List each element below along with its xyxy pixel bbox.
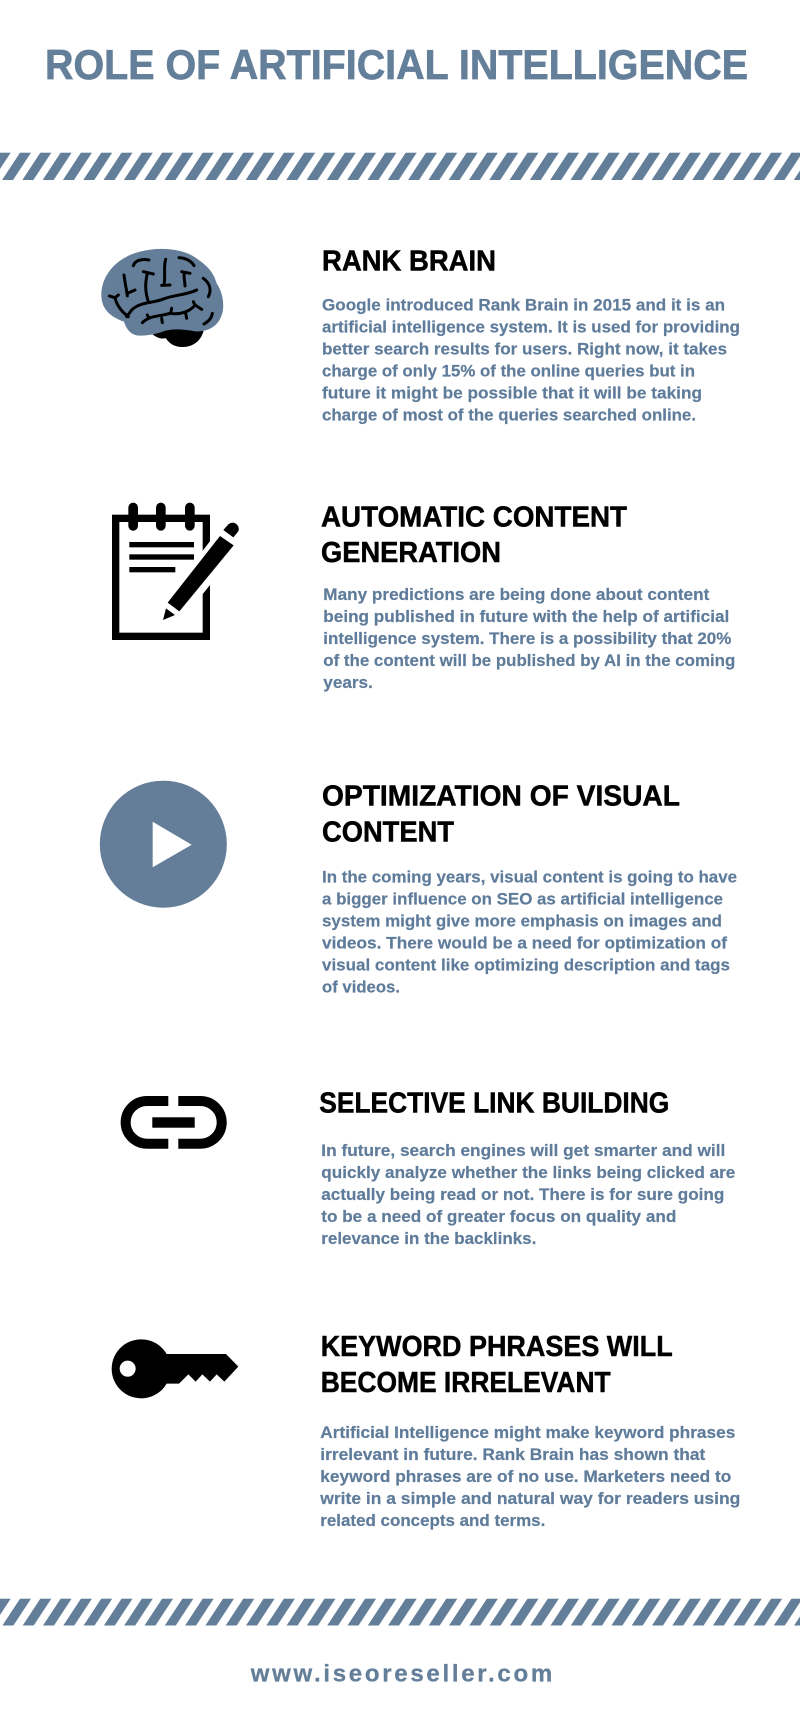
text: selective link building: actually being read or not. There is for sure going <box>321 1185 724 1204</box>
heading: automatic content generation <box>321 502 627 569</box>
heading: automatic content generation: AUTOMATIC CONTENT <box>321 502 627 534</box>
text: selective link building: to be a need of greater focus on quality and <box>321 1207 676 1226</box>
text: keyword phrases will become irrelevant: Artificial Intelligence might make keyword phrases <box>320 1423 735 1442</box>
bottom striped band <box>0 1599 800 1626</box>
text: rank brain: charge of most of the queries searched online. <box>322 406 696 425</box>
text: optimization of visual content: visual content like optimizing description and tags <box>322 955 730 974</box>
text: automatic content generation <box>323 585 735 692</box>
text: keyword phrases will become irrelevant <box>319 1423 740 1530</box>
text: keyword phrases will become irrelevant: related concepts and terms. <box>320 1511 545 1530</box>
text: optimization of visual content <box>322 867 737 996</box>
text: rank brain <box>322 296 740 425</box>
text: rank brain: artificial intelligence system. It is used for providing <box>322 318 740 337</box>
text: selective link building: relevance in the backlinks. <box>321 1229 536 1248</box>
text: rank brain: Google introduced Rank Brain in 2015 and it is an <box>322 296 725 315</box>
icon: key <box>112 1339 238 1398</box>
text: selective link building: In future, search engines will get smarter and will <box>321 1141 725 1160</box>
footer website url: www.iseoreseller.com <box>250 1660 552 1687</box>
icon: notepad and pencil <box>116 503 239 636</box>
heading: optimization of visual content <box>322 780 680 848</box>
text: optimization of visual content: of videos. <box>322 977 400 996</box>
text: automatic content generation: Many predictions are being done about content <box>323 585 710 604</box>
text: automatic content generation: of the content will be published by AI in the coming <box>323 651 735 670</box>
title: ROLE OF ARTIFICIAL INTELLIGENCE <box>45 41 748 88</box>
text: automatic content generation: being published in future with the help of artificial <box>323 607 729 626</box>
text: rank brain: charge of only 15% of the online queries but in <box>322 362 695 381</box>
icon: chain link <box>126 1101 222 1144</box>
text: rank brain: better search results for users. Right now, it takes <box>322 340 727 359</box>
text: selective link building <box>321 1141 735 1248</box>
text: optimization of visual content: a bigger influence on SEO as artificial intelligence <box>322 889 723 908</box>
text: rank brain: future it might be possible that it will be taking <box>322 384 702 403</box>
text: keyword phrases will become irrelevant: write in a simple and natural way for readers using <box>319 1489 740 1508</box>
top striped band <box>0 153 800 180</box>
heading: keyword phrases will become irrelevant: KEYWORD PHRASES WILL <box>321 1331 673 1363</box>
text: optimization of visual content: In the coming years, visual content is going to have <box>322 867 737 886</box>
text: keyword phrases will become irrelevant: irrelevant in future. Rank Brain has shown that <box>320 1445 706 1464</box>
text: keyword phrases will become irrelevant: keyword phrases are of no use. Marketers need to <box>320 1467 731 1486</box>
icon: brain <box>101 249 223 347</box>
text: automatic content generation: intelligence system. There is a possibility that 20% <box>323 629 731 648</box>
text: selective link building: quickly analyze whether the links being clicked are <box>321 1163 735 1182</box>
icon: play button <box>100 781 227 908</box>
text: optimization of visual content: system might give more emphasis on images and <box>322 911 722 930</box>
text: automatic content generation: years. <box>323 673 373 692</box>
heading: keyword phrases will become irrelevant: BECOME IRRELEVANT <box>321 1367 611 1399</box>
heading: keyword phrases will become irrelevant <box>321 1331 673 1399</box>
text: optimization of visual content: videos. There would be a need for optimization of <box>322 933 727 952</box>
heading: optimization of visual content: OPTIMIZATION OF VISUAL <box>322 780 680 812</box>
heading: rank brain: RANK BRAIN <box>322 246 496 278</box>
heading: selective link building: SELECTIVE LINK BUILDING <box>319 1087 669 1119</box>
heading: optimization of visual content: CONTENT <box>322 816 454 848</box>
heading: automatic content generation: GENERATION <box>321 537 501 569</box>
